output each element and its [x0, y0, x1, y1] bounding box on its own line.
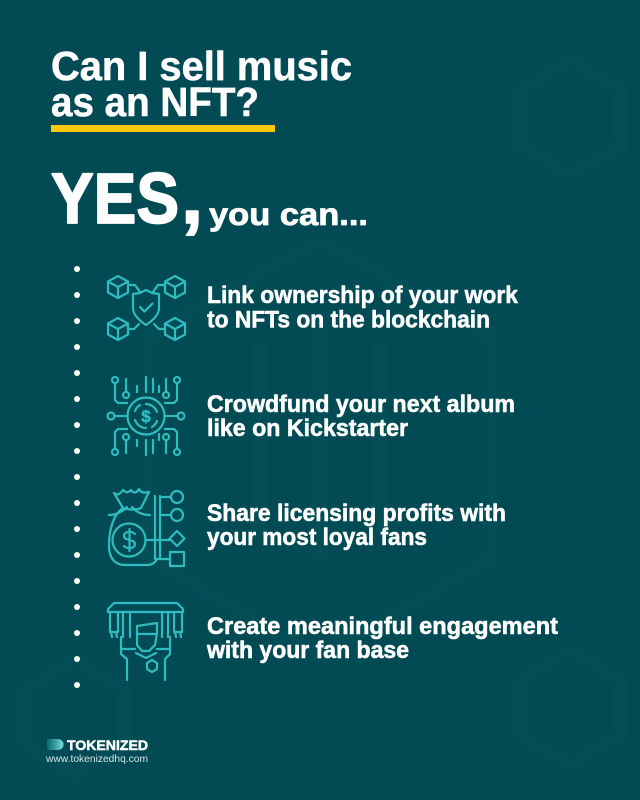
title: as an NFT?: [51, 79, 259, 125]
icon: dollar coin circuit: [108, 377, 184, 455]
list item 1 text: Link ownership of your work: [207, 282, 518, 309]
logo: Tokenized: TOKENIZED: [67, 737, 148, 753]
website url: www.tokenizedhq.com: [45, 754, 148, 765]
title: Can I sell music: [51, 43, 352, 89]
list item 4 text: Create meaningful engagement: [207, 613, 558, 640]
heading: YES, you can...: you can...: [209, 196, 368, 232]
list item 1 text: [207, 282, 518, 334]
list item 2 text: [207, 391, 515, 442]
list item 3 text: Share licensing profits with: [207, 500, 506, 527]
heading: YES, you can...: ,: [181, 151, 203, 240]
icon: shield and blockchain cubes: [108, 276, 185, 340]
list item 2 text: like on Kickstarter: [207, 415, 408, 442]
dollar sign: $: [141, 407, 151, 426]
list item 1 text: to NFTs on the blockchain: [207, 306, 490, 334]
list item 2 text: Crowdfund your next album: [207, 391, 515, 418]
heading: YES, you can...: YES: [51, 160, 179, 239]
list item 3 text: your most loyal fans: [207, 524, 427, 551]
yellow underline: [51, 125, 275, 132]
icon: money bag with flow: [109, 489, 184, 566]
list item 4 text: with your fan base: [206, 637, 409, 664]
list item 4 text: [206, 613, 558, 664]
icon: hands holding a card: [108, 603, 183, 680]
list item 3 text: [207, 500, 506, 551]
heading: YES, you can...: [51, 151, 368, 240]
dotted vertical line: [74, 266, 80, 688]
title: [51, 43, 352, 125]
